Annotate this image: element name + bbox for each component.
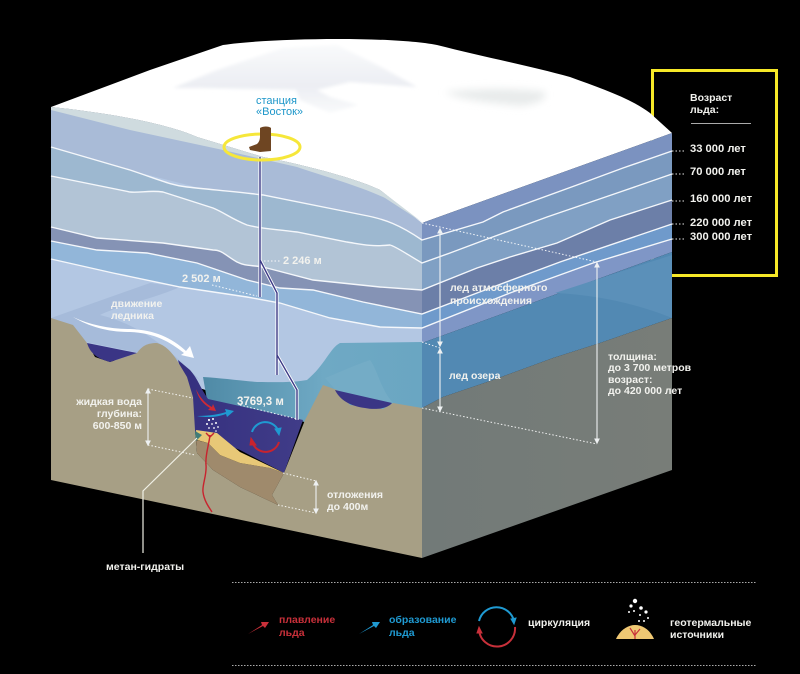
glacier shade xyxy=(51,283,200,380)
layer band 1 xyxy=(51,147,422,263)
panel: right rock face xyxy=(422,318,672,558)
panel: left face ice layers xyxy=(51,107,422,460)
melt arrow in lake xyxy=(196,389,216,411)
label: station: «Восток» xyxy=(256,106,303,118)
snow shadow xyxy=(445,89,545,106)
icon: station building xyxy=(249,126,271,152)
age legend frame xyxy=(652,70,776,276)
panel: right face ice layers xyxy=(422,133,672,408)
right band 2 xyxy=(422,174,672,290)
legend: melting text: плавление xyxy=(279,614,335,626)
label: thickness and age: до 420 000 лет xyxy=(608,385,682,397)
legend: formation text: образование xyxy=(389,614,457,626)
age legend text: 33 000 лет xyxy=(690,143,746,155)
legend: melting text: льда xyxy=(279,627,305,639)
label: atmospheric ice: происхождения xyxy=(450,295,532,307)
label: glacier movement: движение xyxy=(111,298,163,310)
age legend text xyxy=(690,92,753,243)
layer band 2 xyxy=(51,176,422,290)
white glacier movement arrow xyxy=(73,317,194,358)
top snow surface xyxy=(51,39,672,223)
age legend text: 70 000 лет xyxy=(690,166,746,178)
label: station: станция xyxy=(256,95,297,107)
right band 3 xyxy=(422,200,672,314)
age legend text: 220 000 лет xyxy=(690,217,753,229)
right lake ice xyxy=(422,252,672,408)
age legend text: льда: xyxy=(690,104,719,116)
label: sediments: отложения xyxy=(327,489,383,501)
age legend text: 160 000 лет xyxy=(690,193,753,205)
label: 2 502 m: 2 502 м xyxy=(182,273,221,285)
label: lake ice: лед озера xyxy=(449,370,501,382)
right band 1 xyxy=(422,151,672,263)
station marker ring xyxy=(224,134,300,160)
pool: left xyxy=(87,343,137,362)
inner ice ridge xyxy=(325,360,395,405)
layer band 3 xyxy=(51,227,422,314)
lake water xyxy=(178,360,303,473)
methane hydrate wedge xyxy=(195,431,202,441)
ice layer lines xyxy=(51,147,672,328)
label: liquid water depth: глубина: xyxy=(97,408,142,420)
label: 3769,3 m: 3769,3 м xyxy=(237,396,284,408)
panel: bedrock front xyxy=(51,318,422,558)
circulation icon in lake xyxy=(250,422,281,452)
geothermal bubbles xyxy=(206,418,219,432)
pool: right xyxy=(335,390,392,409)
label: atmospheric ice: лед атмосферного xyxy=(450,282,547,294)
legend: formation text: льда xyxy=(389,627,415,639)
legend: melting arrow xyxy=(248,622,269,634)
lower sediment xyxy=(196,440,284,505)
legend: circulation icon xyxy=(477,607,516,647)
dimension arrows xyxy=(146,229,599,513)
age legend text: Возраст xyxy=(690,92,732,104)
legend: geothermal text: источники xyxy=(670,629,724,641)
label: sediments: до 400м xyxy=(327,501,369,513)
label: glacier movement: ледника xyxy=(111,310,154,322)
right band 5 xyxy=(422,239,672,343)
label: thickness and age: возраст: xyxy=(608,374,653,386)
legend: geothermal text: геотермальные xyxy=(670,617,752,629)
label: methane hydrates: метан-гидраты xyxy=(106,561,184,573)
bottom legend xyxy=(232,582,757,666)
snow contour pattern xyxy=(173,45,417,113)
upper sediment xyxy=(196,430,284,473)
legend: geothermal icon xyxy=(616,599,654,639)
methane hydrate pointer xyxy=(143,438,197,553)
layer band 4 xyxy=(51,241,422,328)
dotted measurement lines xyxy=(148,151,686,513)
red heat vein xyxy=(203,433,214,512)
age legend text: 300 000 лет xyxy=(690,231,753,243)
legend: circulation text: циркуляция xyxy=(528,617,590,629)
legend: formation arrow xyxy=(359,622,380,634)
label: liquid water depth: 600-850 м xyxy=(93,420,142,432)
right band 4 xyxy=(422,224,672,328)
label: thickness and age: толщина: xyxy=(608,351,657,363)
top ice layer xyxy=(51,107,422,245)
freeze arrow in lake xyxy=(197,409,234,417)
label: thickness and age: до 3 700 метров xyxy=(608,362,692,374)
grey snow edge strip xyxy=(51,107,422,222)
borehole xyxy=(260,157,297,420)
right lake ice lighter lobe xyxy=(555,255,672,318)
label: 2 246 m: 2 246 м xyxy=(283,255,322,267)
label: liquid water depth: жидкая вода xyxy=(75,396,142,408)
panel: subglacial lake ice xyxy=(203,342,422,422)
